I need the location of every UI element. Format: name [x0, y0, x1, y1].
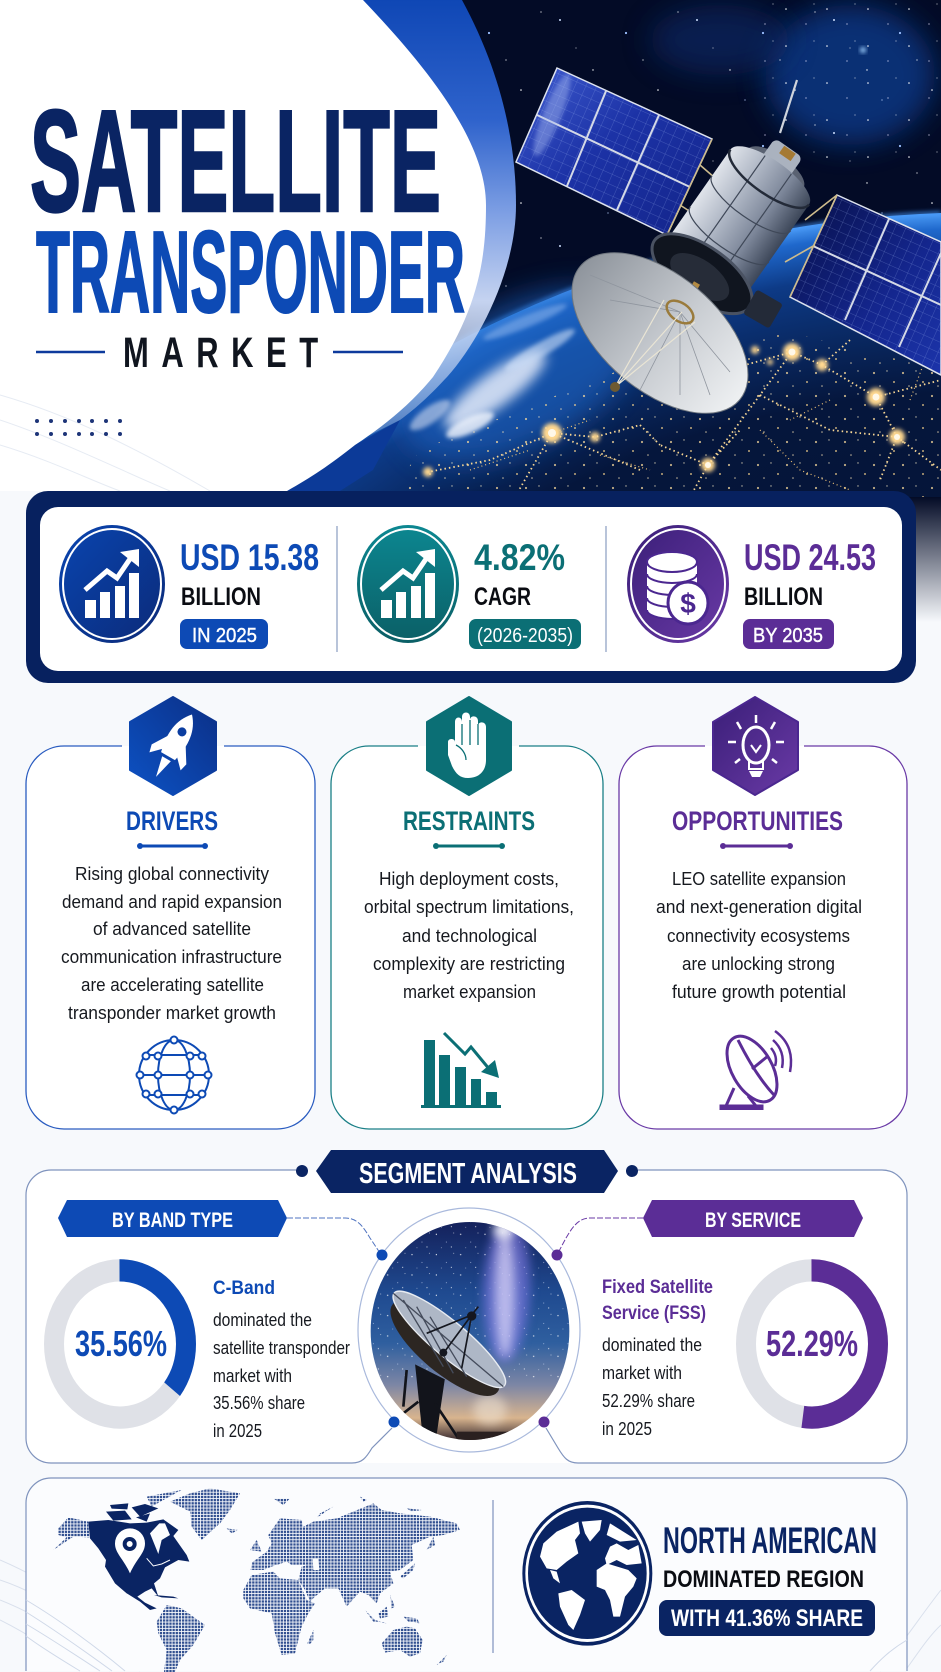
icon: stop hand hexagon	[427, 697, 511, 795]
white hero curve	[0, 0, 486, 491]
text: opportunities description: and next-generation digital	[656, 896, 862, 917]
solar panel left	[516, 68, 715, 235]
icon: light bulb hexagon	[713, 697, 798, 795]
stat: 2025 market size: BILLION	[181, 583, 261, 611]
text: fss description: Service (FSS)	[602, 1303, 706, 1324]
text: fss description	[602, 1277, 713, 1439]
pill: forecast period	[469, 619, 581, 649]
by service	[602, 1200, 878, 1439]
text: TRANSPONDER	[36, 207, 465, 337]
world map	[53, 1488, 460, 1672]
map: north america highlighted	[88, 1503, 189, 1610]
pill: in 2025	[180, 619, 268, 649]
segment banner: SEGMENT ANALYSIS	[359, 1158, 577, 1190]
panel: restraints	[331, 697, 603, 1129]
panel: drivers	[26, 697, 315, 1129]
banner: by service: BY SERVICE	[705, 1209, 801, 1232]
icon: growth chart blue	[59, 525, 165, 643]
map: americas	[53, 1488, 240, 1672]
city lights	[390, 330, 941, 497]
donut chart: 52.29%	[746, 1270, 878, 1418]
connectors	[287, 1218, 643, 1253]
text: opportunities description: connectivity ecosystems	[667, 925, 850, 946]
title	[30, 80, 465, 376]
decorative dots	[35, 419, 122, 436]
panel: regional dominance	[26, 1478, 907, 1672]
icon: falling bar chart	[421, 1033, 501, 1108]
text: drivers description	[61, 863, 282, 1023]
text: restraints description: and technological	[402, 925, 537, 946]
icon: growth chart teal	[357, 525, 459, 643]
banner: by band type	[58, 1200, 287, 1237]
satellite illustration	[516, 68, 941, 444]
text: opportunities description: LEO satellite expansion	[672, 868, 846, 889]
stat: 2035 market size: USD 24.53	[744, 536, 876, 578]
heading: opportunities: OPPORTUNITIES	[672, 806, 843, 836]
title line: satellite: SATELLITE	[30, 80, 441, 242]
banner: by service	[643, 1200, 863, 1237]
map: old world dotted	[243, 1497, 460, 1665]
icon: coins: $	[680, 588, 696, 619]
pill: share: WITH 41.36% SHARE	[671, 1605, 863, 1632]
panel: opportunities	[619, 697, 907, 1129]
text: c-band description: C-Band	[213, 1278, 275, 1299]
panel: segment analysis	[26, 1150, 907, 1463]
text: c-band description: satellite transponder	[213, 1337, 350, 1358]
stat: 2035 market size: BILLION	[744, 583, 823, 611]
stat: 2025 market size: USD 15.38	[180, 536, 319, 578]
text: drivers description: Rising global connectivity	[75, 863, 270, 884]
solar panel right	[785, 195, 941, 375]
text: fss description: Fixed Satellite	[602, 1277, 713, 1298]
text: fss description: in 2025	[602, 1418, 652, 1439]
icon: satellite dish	[717, 1028, 791, 1110]
text: restraints description: complexity are restricting	[373, 953, 565, 974]
blue swoosh band	[360, 0, 516, 440]
icon: globe	[522, 1501, 652, 1646]
text: drivers description: transponder market growth	[68, 1002, 276, 1023]
antenna	[780, 80, 797, 133]
text: fss description: market with	[602, 1362, 682, 1383]
text: restraints description: market expansion	[403, 981, 536, 1002]
map pin	[115, 1528, 145, 1573]
text: c-band description: dominated the	[213, 1309, 312, 1330]
segment banner	[296, 1150, 638, 1193]
stat: 2035 market size	[627, 525, 876, 649]
text: drivers description: communication infrastructure	[61, 946, 282, 967]
text: c-band description: in 2025	[213, 1420, 262, 1441]
map: dotted greenland, alaska, south america	[53, 1488, 240, 1672]
market rules	[36, 351, 403, 353]
central photo: dish under milky way	[358, 1208, 580, 1452]
text: opportunities description: future growth potential	[672, 981, 846, 1002]
heading: restraints: RESTRAINTS	[403, 806, 535, 836]
parabolic dish	[543, 222, 777, 444]
text: drivers description: demand and rapid expansion	[62, 891, 282, 912]
text: drivers description: are accelerating satellite	[81, 974, 264, 995]
stat: cagr: CAGR	[474, 583, 531, 611]
text: c-band description: market with	[213, 1365, 292, 1386]
pill: share	[659, 1600, 875, 1636]
text: drivers description: of advanced satellite	[93, 918, 251, 939]
donut chart: 35.56%: 35.56%	[75, 1323, 167, 1364]
title line: market: MARKET	[123, 328, 318, 376]
panel: key statistics	[26, 491, 916, 683]
stat: cagr: 4.82%	[474, 536, 565, 578]
pill: in 2025: IN 2025	[192, 625, 257, 647]
hero image: space and earth	[233, 0, 941, 498]
pill: by 2035	[743, 619, 834, 649]
stat: cagr	[357, 525, 581, 649]
text: fss description: dominated the	[602, 1334, 702, 1355]
icon: network globe	[136, 1036, 212, 1114]
icon: coins	[627, 525, 729, 643]
text: restraints description: High deployment costs,	[379, 868, 559, 889]
text: restraints description	[364, 868, 574, 1002]
text: c-band description: 35.56% share	[213, 1392, 305, 1413]
stat: 2025 market size	[59, 525, 319, 649]
text: north american dominated region	[659, 1519, 877, 1636]
banner: by band type: BY BAND TYPE	[112, 1209, 233, 1232]
text: north american dominated region: DOMINATED REGION	[663, 1566, 864, 1593]
pill: forecast period: (2026-2035)	[477, 625, 573, 647]
text: opportunities description	[656, 868, 862, 1002]
text: opportunities description: are unlocking strong	[682, 953, 835, 974]
pill: by 2035: BY 2035	[753, 625, 823, 647]
text: restraints description: orbital spectrum limitations,	[364, 896, 574, 917]
by band type	[54, 1200, 350, 1441]
text: c-band description	[213, 1278, 350, 1441]
heading: drivers: DRIVERS	[126, 806, 218, 836]
donut chart: 52.29%: 52.29%	[766, 1323, 858, 1364]
donut chart: 35.56%	[54, 1270, 186, 1418]
text: fss description: 52.29% share	[602, 1390, 695, 1411]
satellite body	[639, 115, 837, 329]
icon: rocket hexagon	[130, 697, 216, 795]
